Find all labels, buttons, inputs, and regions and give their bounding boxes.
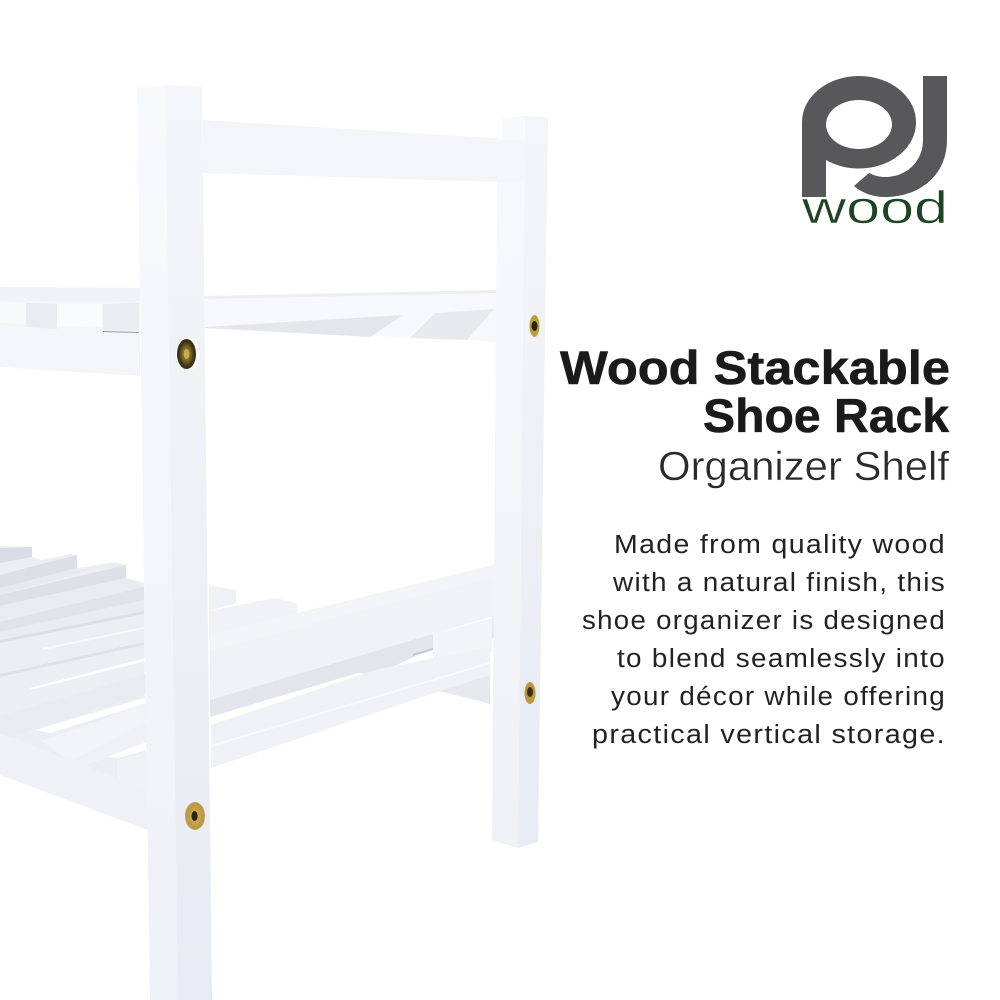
lower shelf front rail <box>209 565 518 768</box>
heading line 2: Shoe Rack <box>703 389 950 442</box>
right post <box>492 116 548 848</box>
upper shelf left of post <box>0 287 140 376</box>
description text: with a natural finish, this <box>612 569 946 597</box>
logo wordmark: wood <box>801 182 948 233</box>
description text: practical vertical storage. <box>592 721 946 749</box>
heading line 1: Wood Stackable <box>560 341 950 394</box>
title <box>560 341 950 489</box>
description text: to blend seamlessly into <box>617 645 946 673</box>
screw: upper right <box>530 315 540 337</box>
top rail <box>203 120 526 183</box>
logo mark <box>802 76 947 197</box>
left post <box>137 85 212 1000</box>
subtitle: Organizer Shelf <box>658 443 950 489</box>
lower shelf slats <box>0 546 148 1000</box>
description text <box>582 531 946 749</box>
logo <box>801 76 948 233</box>
description text: shoe organizer is designed <box>582 607 946 635</box>
description text: your décor while offering <box>611 683 946 711</box>
upper shelf back rail <box>204 290 497 342</box>
screw: lower right <box>524 682 536 704</box>
shoe rack photo <box>0 85 548 1000</box>
screw: lower left <box>185 802 205 830</box>
description text: Made from quality wood <box>614 531 946 559</box>
screw: upper left <box>176 338 200 370</box>
